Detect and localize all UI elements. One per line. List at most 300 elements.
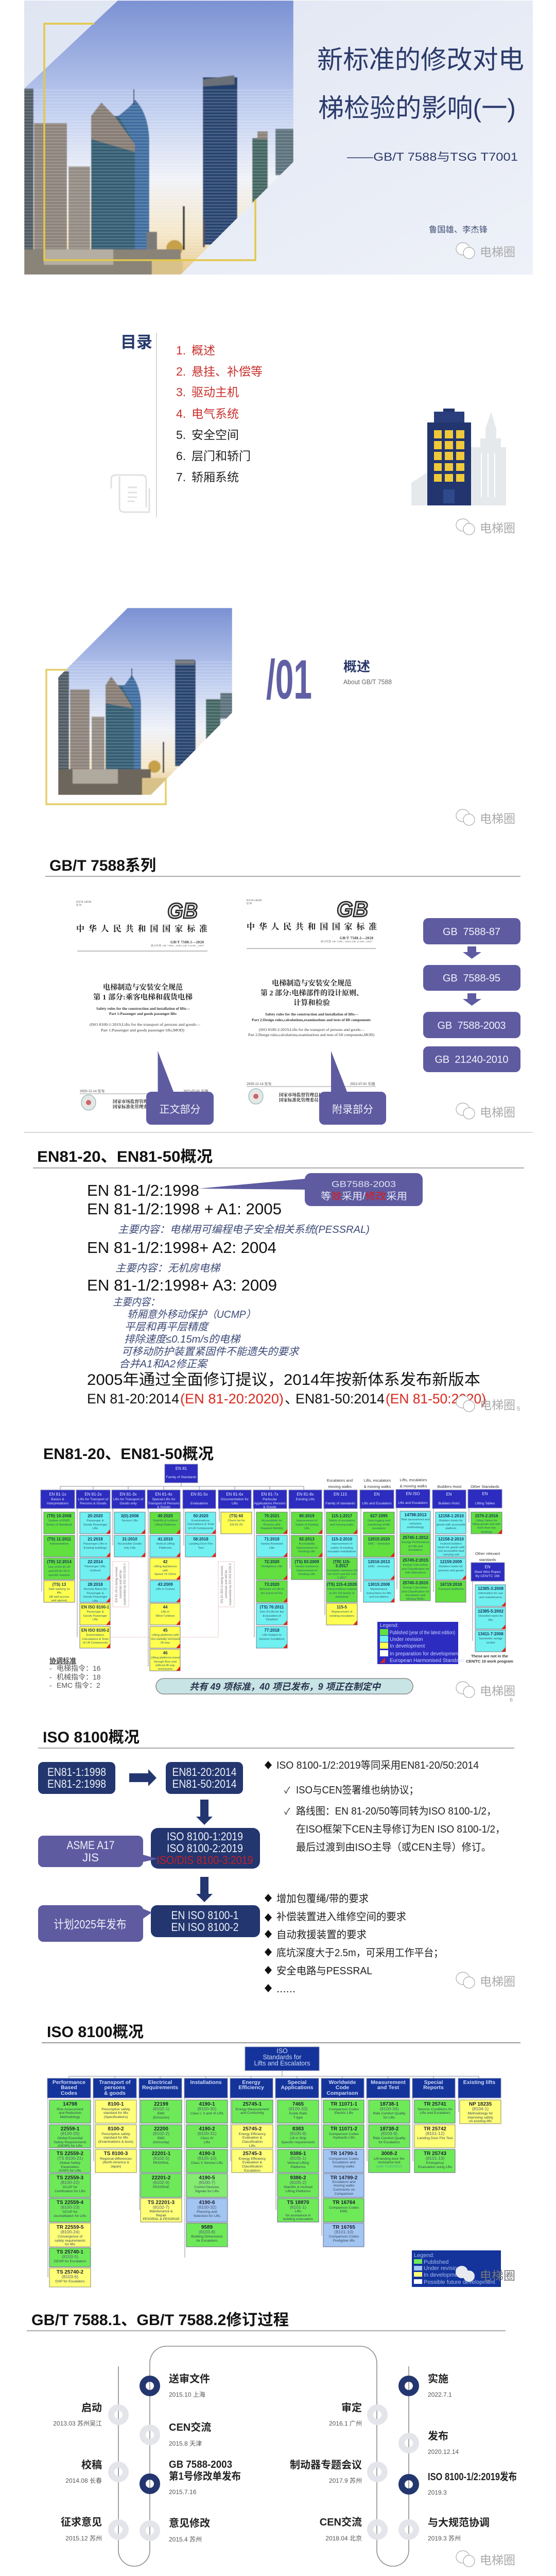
column: installations: Class IV [200,2137,214,2140]
column: EN 115: escalator installations [327,1550,356,1553]
column: builders hoist: 12158-2:2010 [438,1537,464,1541]
panel: section divider 01 [46,608,515,825]
column headers: Applications [281,2084,314,2091]
column: EN 81-7x: Accessibility for [262,1519,282,1522]
column: lifts and escalators EN ISO: methodology [407,1526,424,1529]
harmonised standards note: - [49,1673,52,1681]
column: performance based codes: 22559-1 [61,2126,80,2132]
legend: In preparation for development [390,1651,460,1657]
column: performance based codes: (8103-6) [62,2274,78,2279]
column: special applications: (8101-1) [290,2205,306,2210]
legend: Published (year of the latest edition) [390,1630,455,1636]
root node: Standards for [263,2054,302,2061]
column: performance based codes: TS 22559-4 [57,2200,84,2206]
column: electrical requirements: 22199 [154,2102,168,2107]
timeline labels: right branch: CEN交流 [320,2516,362,2528]
note: EN 81-20 revision: superseded by EN ISO 8100-1 [124,1563,127,1605]
column: energy efficiency: Energy Efficiency [239,2132,266,2136]
column headers: & Goods [157,1505,171,1509]
document cover: part 2: 第 2 部分:电梯部件的设计原则、 [260,989,363,997]
column: worldwide code comparison: moving walks [334,2184,355,2188]
column: special applications: (8105-2) [290,2180,306,2185]
contents list: 7. [176,470,186,484]
column: worldwide code comparison: (8101-10) [335,2229,354,2234]
column: EN 81-2x: Goods Passenger [83,1596,107,1599]
category labels: & moving walks [364,1484,391,1489]
cover subtitle: ——GB/T 7588与TSG T7001 [347,150,518,163]
column: performance based codes: Certification for Lifts [55,2190,86,2193]
summary pill: 共有 49 项标准，40 项已发布，9 项正在制定中 [189,1682,381,1692]
harmonised standards note [49,1657,101,1689]
root node [245,2047,319,2071]
column: transport of persons and goods: TS 8100-3 [104,2151,128,2157]
column: transport of persons and goods [95,2100,136,2173]
timeline path [118,2346,409,2566]
column: EN 81-4x: non-partially enclosed [151,1638,180,1641]
column: EN 81-4x: 43:2009 [158,1582,173,1587]
callout: annex part: 附录部分 [332,1104,373,1115]
amendments list: (EN 81-20:2020) [180,1391,284,1406]
column: EN 81-5x: Calculations & Tests [187,1523,214,1526]
flow: standard editions [423,918,520,1072]
contents list: 层门和轿门 [192,449,251,463]
callout: body part: 正文部分 [160,1104,201,1115]
other relevant standards: These are not in the [471,1654,508,1658]
other relevant standards: 13411-7:2008 [478,1632,503,1636]
timeline labels: left branch: 2015.12 苏州 [65,2535,102,2542]
column: EN 81-1x: (TS) 11:2011 [47,1537,72,1541]
column headers: EN ISO [406,1492,420,1496]
timeline labels: left branch: 2014.08 长春 [65,2477,102,2484]
column: EN 81-7x: Lifts Subject to [262,1634,282,1637]
flow: standard editions: GB 21240-2010 [435,1054,509,1065]
amendments list: 2005年通过全面修订提议，2014年按新体系发布新版本 [87,1371,480,1388]
amendments list: 排除速度≤0.15m/s的电梯 [124,1334,241,1345]
document cover: part 1: 2022-07-01 实施 [183,1089,208,1093]
panel: EN81-20 / EN81-50 history [33,1148,524,1412]
amendments list: 、 [285,1391,299,1406]
column: EN 115: 115-5 [337,1605,348,1609]
column: worldwide code comparison: Comparison Codes [329,2108,359,2111]
column: EN 115: 115-1:2017 [332,1514,353,1518]
other relevant standards: By CEN/TC 168 [476,1574,500,1578]
legend [377,1622,463,1664]
column: worldwide code comparison: EMC [340,2210,348,2213]
column headers: Applications Persons [254,1502,286,1505]
amendments list: EN 81-1/2:1998 [87,1181,199,1199]
column: energy efficiency: Energy Efficiency [239,2157,266,2161]
timeline labels: left branch: 启动 [81,2402,102,2414]
column: performance based codes: Accreditation for Lifts [54,2214,86,2218]
column: performance based codes: 14798 [63,2102,77,2107]
note: EN 81-50 revision [110,1562,234,1637]
page number: 6 [510,1697,513,1703]
harmonised standards note: - [49,1681,52,1689]
legend: Possible future development [424,2279,495,2285]
column headers: Code [336,2084,349,2091]
column: special applications: Vertical Lifting [287,2161,309,2165]
timeline labels: right branch: 发布 [428,2430,448,2442]
column: performance based codes: Safety Requirements [54,2141,86,2144]
yellow frame [46,670,166,804]
timeline labels: left branch: 校稿 [81,2459,102,2471]
document cover: part 1: Part 1:Passenger and goods passenger lifts [109,1012,177,1016]
document cover: part 2: 部分代替 GB 7588—2003,GB 21240—2007 [321,940,373,943]
contents list: 3. [176,385,186,399]
column: EN 81-1x: Safe working on [48,1588,70,1591]
column headers: persons [105,2084,126,2091]
column: performance based codes: for lifts [65,2243,76,2246]
column: measurement and test: 18738-1 [380,2102,399,2107]
other relevant standards: 12385-3:2008 [478,1586,503,1591]
contents list: 1. [176,344,186,357]
column: special applications: Lifts [295,2210,302,2213]
column headers [41,1489,502,1509]
legend [412,2250,501,2287]
column headers: Lifting Tables [475,1502,495,1505]
timeline labels: left branch: GB 7588-2003 [169,2459,232,2470]
column headers: Codes [61,2090,77,2096]
column headers: EN 115 [334,1492,348,1497]
column: EN 81-2x: Passenger & [86,1519,104,1522]
column: EN 81-4x: 40:2020 [158,1514,173,1518]
category labels: Escalators and [327,1478,353,1483]
column: builders hoist: Builders hoists for [439,1519,463,1522]
root node: ISO [276,2047,288,2055]
column: performance based codes: TS 25740-1 [57,2249,84,2255]
column: electrical requirements: Repair [156,2214,167,2217]
column: worldwide code comparison: TR 11071-1 [331,2102,358,2107]
column: special reports: TR 25742 [424,2126,446,2132]
column: EN 81-7x: Disabled [266,1618,277,1621]
column: electrical requirements: PESSRAL & PESSRAE [143,2217,180,2221]
column headers: Special [424,2079,443,2086]
amendments list: 平层和再平层精度 [125,1321,210,1333]
document cover: part 2: 中华人民共和国国家标准 [247,922,377,931]
column: EN 81-1x [44,1512,75,1602]
column: measurement and test: Ride Comfort Quality [373,2112,406,2115]
column: measurement and test: Ride Comfort Quality [373,2137,406,2140]
amendments list: 主要内容：无机房电梯 [115,1263,221,1274]
column: EN 81-6x: EN 81-20 [230,1523,242,1527]
column: installations: Signals for Lifts [195,2190,219,2193]
column: EN 81-2x: Lifts [93,1527,98,1530]
column: lifting tables: more than two [477,1527,496,1530]
section sub-heading: About GB/T 7588 [343,678,392,686]
column: installations: (8100-31) [198,2131,217,2136]
column: performance based codes: GSP for Escalators [55,2280,85,2283]
column: builders hoist: 12158-1:2010 [438,1514,464,1518]
column: EN 81-4x: Lifting platforms with [152,1634,179,1637]
column: electrical requirements [141,2100,182,2222]
column: performance based codes: (8100-24) [61,2229,80,2234]
column: lifts and escalators EN: Data logging and [368,1519,390,1522]
column: worldwide code comparison: Escalators and [333,2161,356,2164]
column: EN 81-2x: Calculations & Tests [82,1638,109,1641]
panel: revision timeline [27,2312,517,2567]
column: EN 81-5x: 58:2018 [193,1537,208,1541]
column: energy efficiency: Evaluation & [242,2161,263,2164]
column: EN 81-4x: Stairlifts & Inclined [153,1519,178,1522]
watermark [456,1972,515,1988]
column: EN 81-5x [185,1512,216,1557]
column: EN 115: Replacement of [332,1611,353,1614]
column: installations: Planning and [197,2210,217,2214]
column: EN 81-6x: Check list for [228,1519,245,1522]
column: EN 81-7x: Evacuation of [263,1615,281,1618]
category labels: Builders Hoist [438,1484,462,1489]
column headers: Lifts and Escalators [362,1502,392,1505]
column: EN 115: Improvement of [332,1543,353,1546]
column: EN 81-8x: Accessibility [299,1543,315,1546]
column: EN 81-8x: Improvement of [297,1547,318,1550]
column: EN 81-2x: Passenger Lifts, [84,1565,106,1568]
column: energy efficiency: 25745-3 [243,2151,262,2157]
column: EN 81-8x: 80:2019 [299,1514,315,1518]
column: special applications: building evacuation [283,2217,313,2221]
amendments list: EN 81-1/2:1998 + A1: 2005 [87,1200,282,1218]
timeline labels: right branch: 2016.1 广州 [329,2420,362,2427]
flow: EN to ISO: EN81-50:2014 [172,1777,237,1790]
column: lifts and escalators EN ISO [400,1511,430,1601]
column headers: Performance [53,2079,85,2086]
notes on adoption: ✓ [284,1786,290,1795]
column headers: EN 81-2x [84,1492,102,1497]
column: EN 81-8x: Vandal resistance [295,1565,319,1568]
column: measurement and test: 18738-2 [380,2126,399,2132]
document cover: part 2: Q 78 [247,903,252,905]
column: performance based codes: (TS 8100-21) [57,2156,83,2161]
panel: ISO standards chart [42,2024,520,2287]
contents list: 4. [176,407,186,420]
timeline labels: right branch: 2019.3 [428,2489,447,2496]
column: EN 81-2x: Goods Passenger [83,1523,107,1527]
column headers: Existing lifts [463,2079,495,2086]
column: transport of persons and goods: Prescriptive safety [101,2108,130,2111]
section number: /01 [266,648,312,710]
callout: body part [146,1051,214,1125]
flow: EN to ISO: 计划2025年发布 [54,1918,127,1931]
note: EN 81-20 revision: corrected and will be [119,1570,123,1599]
document cover: part 2: GB [337,897,368,921]
column: builders hoist: carrying unit [443,1553,459,1556]
column: EN 115: 115:2010 and EN 115- [327,1573,357,1576]
column: existing lifts: improving safety [467,2116,493,2120]
column headers: Builders Hoist [439,1502,460,1505]
category labels: Other Standards [471,1484,499,1489]
document cover: part 2: 国家标准化管理委员会 [279,1097,323,1103]
document cover: part 2: 2022-07-01 实施 [350,1081,375,1086]
watermark [456,2551,515,2567]
column: EN 81-3x: Accessible Goods [118,1543,142,1546]
column: worldwide code comparison: TR 11071-2 [331,2126,358,2132]
column: EN 81-2x: 28:2018 [88,1582,103,1587]
column headers: EN [482,1492,488,1496]
column: EN 81-5x: 50:2020 [193,1514,208,1518]
column: builders hoist [436,1512,466,1602]
column: performance based codes: and Reduction [59,2111,81,2115]
column: special applications: Platforms [291,2165,306,2169]
summary pill [156,1679,413,1694]
column: performance based codes: TS 25740-2 [57,2269,84,2275]
column: EN 81-2x: Lifts [93,1600,98,1603]
timeline labels: left branch: 2015.7.16 [169,2488,197,2496]
column: EN 115: 3:2017 [336,1564,349,1568]
watermark: 电梯圈 [480,1398,515,1412]
list of new requirements: 增加包覆绳/带的要求 [276,1893,369,1905]
document cover: part 1: Safety rules for the construction and installation of lifts— [96,1007,190,1011]
column: builders hoist: persons and goods [438,1569,464,1572]
column: electrical requirements: PESSRAE [153,2185,170,2189]
column: lifts and escalators EN ISO: Energy Calculation [403,1564,428,1567]
harmonised standards note: 协调标准 [49,1657,76,1665]
column: EN 115 [326,1512,358,1625]
timeline labels: right branch: 2018.04 北京 [325,2535,362,2542]
column: energy efficiency: Energy Measurement [236,2108,269,2111]
column: lifts and escalators EN ISO: 25745-1:2012 [403,1535,428,1540]
column: measurement and test: resistance test [378,2161,401,2164]
column: EN 81-4x: 42 [163,1560,168,1564]
column: builders hoist: non-accessible load [438,1550,464,1553]
timeline labels: right branch: 2017.9 苏州 [329,2477,362,2484]
column: lifts and escalators EN: and escalators [369,1596,389,1599]
column: special applications: 9386-1 [290,2151,306,2157]
column headers: Measurement [371,2079,406,2086]
column: special applications: 7465 [292,2102,304,2107]
watermark [456,809,515,825]
amendments list: (EN 81-50:2020) [386,1391,486,1406]
column: special applications: (8100-33) [289,2106,308,2111]
column: performance based codes: Parameters [61,2165,79,2169]
flow: EN to ISO: EN81-2:1998 [47,1777,106,1790]
category labels: & moving walks [400,1484,427,1488]
contents list: 悬挂、补偿等 [192,365,263,378]
column: EN 81-8x: Improvement of [297,1569,318,1572]
legend: Legend: [380,1623,398,1629]
notes on adoption: ISO与CEN签署维也纳协议； [296,1784,419,1796]
column: lifts and escalators EN ISO: reduction [409,1522,422,1526]
column: worldwide code comparison: Comparison Codes [329,2206,359,2210]
amendments list: 轿厢意外移动保护（UCMP） [127,1309,256,1320]
flow: EN to ISO: EN ISO 8100-1 [171,1909,239,1922]
column headers: & Goods [263,1505,277,1509]
other relevant standards: lifts [489,1619,493,1622]
cover photo: skyline [24,1,293,275]
column: EN 81-8x: Improvement of [297,1519,318,1522]
list of new requirements: 自动救援装置的要求 [276,1929,367,1941]
column: worldwide code comparison: TR 14799-2 [331,2175,358,2181]
column: special applications [277,2100,319,2222]
category labels: moving walks [328,1484,352,1489]
column: EN 81-7x: Persons with [263,1523,281,1527]
column: special applications: (8100-8) [290,2131,306,2136]
column: lifts and escalators EN: 627:1995 [370,1514,388,1518]
timeline labels: left branch: 第1号修改单发布 [169,2470,241,2482]
column headers: Efficiency [238,2084,264,2091]
category labels: Lifts, escalators [400,1478,427,1482]
column: EN 81-3x: 31:2010 [122,1537,137,1541]
column headers: Documentation for [221,1498,249,1501]
column: EN 81-8x: 82:2013 [299,1537,315,1541]
timeline labels: left branch: 征求意见 [61,2516,102,2528]
column: EN 81-2x: 20:2020 [88,1514,103,1518]
column: installations: 4190-5 [199,2175,215,2181]
timeline labels: right branch: 审定 [341,2401,362,2414]
column headers: EN 81-3x [119,1492,137,1497]
contents list: 驱动主机 [192,385,239,399]
column: performance based codes: Risk Assessment [57,2108,83,2111]
column: EN 115: to EN 115 family of [329,1592,355,1595]
column: worldwide code comparison: Electric Lifts [335,2111,354,2115]
column: energy efficiency: Lifts [249,2144,256,2148]
column: worldwide code comparison: Escalators and [333,2180,356,2184]
column: performance based codes: (8100-20) [61,2131,80,2136]
column: EN 81-1x: Series of Standards [46,1523,73,1527]
column: special reports: Landing Door Fire Test [418,2137,453,2140]
flow: EN to ISO: JIS [82,1851,99,1864]
column: special reports: TR 25743 [424,2151,446,2157]
column: special applications: T-type [293,2116,303,2120]
column headers: Installations [190,2079,222,2086]
column: energy efficiency: and Conformity [240,2111,265,2115]
column: EN 81-3x: 3(0):2008 [121,1514,139,1518]
notes on adoption: ✓ [284,1807,290,1817]
column: lifts and escalators EN ISO: and Classification for [402,1568,429,1571]
column: EN 81-8x: Existing Lifts [299,1573,315,1576]
column: EN 81-1x: System of EN81 [48,1519,70,1522]
root node: Family of Standards [166,1476,197,1479]
column: lifts and escalators EN: monitoring of lifts [368,1523,390,1527]
timeline nodes [111,2379,416,2538]
column: installations: Building Dimensions [191,2235,223,2239]
column: energy efficiency: Classification [242,2165,263,2168]
column headers: Lifts for Transport of [78,1498,108,1501]
column: EN 81-8x [291,1512,322,1580]
column: worldwide code comparison: TR 16764 [333,2200,355,2206]
column: performance based codes: TS 22559-3 [57,2175,84,2181]
column: EN 81-7x: Behavior of Lifts in [259,1588,284,1591]
column: worldwide code comparison: Comparison [335,2192,354,2196]
column: EN 81-8x: Safety of Existing [296,1523,318,1527]
heading: ISO 8100概况 [43,1729,140,1746]
list of new requirements: 底坑深度大于2.5m，可采用工作平台； [276,1947,443,1959]
column: installations: Class V Service Lifts [191,2161,223,2165]
column: measurement and test: (8100-34) [380,2106,399,2111]
panel: ISO 8100 roadmap [38,1729,515,1995]
column: EN 81-4x: enclosures [158,1668,172,1671]
column: worldwide code comparison: Comparison Codes [329,2157,359,2161]
column: electrical requirements: EMC [157,2112,165,2115]
flow: EN to ISO: ISO 8100-1:2019 [167,1830,243,1843]
column: EN 115: Safety of escalators [329,1519,355,1522]
column: transport of persons and goods: standard for lifts [103,2136,129,2140]
column: lifting tables: 1570-2:2016 [475,1514,498,1518]
column: performance based codes: Global Safety [60,2161,81,2165]
flow: EN to ISO: ISO 8100-2:2019 [167,1842,243,1855]
column: worldwide code comparison: Comments on [333,2188,355,2192]
panel: EN 81 family chart [41,1446,515,1703]
column: EN 81-7x: (TS) 76:2011 [260,1605,284,1609]
document cover: part 1: 国家市场监督管理总局 [113,1099,157,1104]
legend: Published [424,2259,448,2265]
document cover: part 2 [247,897,377,1104]
column: lifts and escalators EN ISO: Risk assessment and [401,1518,430,1521]
column: lifting tables: Lifting Tables for [476,1519,497,1522]
column: EN 81-2x: Passenger & [86,1592,104,1595]
flow: EN to ISO: EN ISO 8100-2 [171,1921,239,1934]
column: EN 81-1x: (TR) 12:2014 [47,1560,72,1564]
column headers: Basics & [51,1498,64,1501]
